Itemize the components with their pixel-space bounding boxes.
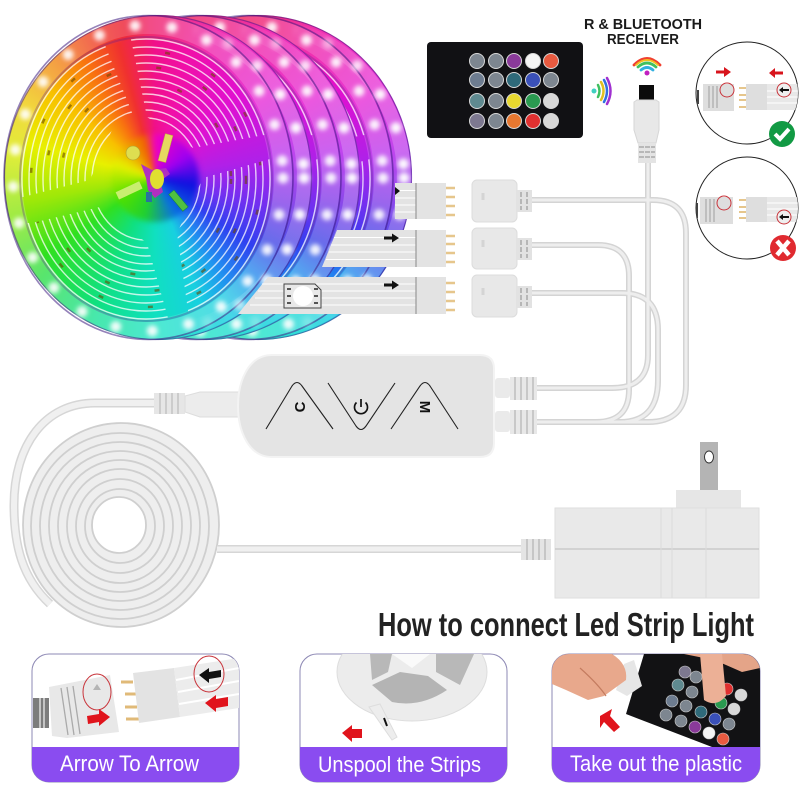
panel: arrow to arrow: Arrow To Arrow <box>60 751 199 776</box>
panel: take out the plastic: Take out the plastic <box>570 751 742 776</box>
receiver label: R & BLUETOOTH <box>584 17 702 33</box>
wires <box>532 163 686 422</box>
strip 3 with LED chip <box>238 277 455 314</box>
power cable to adapter <box>217 545 522 553</box>
panel: unspool the strips: Unspool the Strips <box>318 752 481 777</box>
panel: arrow to arrow <box>32 654 239 782</box>
controller strain relief <box>154 392 242 417</box>
icon: green check <box>769 121 795 147</box>
reel: back <box>227 14 412 340</box>
strip 1 <box>395 183 455 219</box>
icon: sound waves <box>592 78 610 104</box>
LED chip <box>284 284 321 308</box>
panel: unspool the strips <box>300 654 508 782</box>
strip 2 <box>322 230 455 267</box>
icon: power symbol <box>354 399 368 414</box>
callout: correct connection <box>696 42 799 147</box>
icon: red cross <box>770 235 796 261</box>
inline controller: C <box>292 401 309 412</box>
reel: front <box>3 14 313 340</box>
inline controller: M <box>416 401 433 413</box>
female connector 2 <box>472 228 532 269</box>
power cable to coil <box>14 403 156 604</box>
panel: take out the plastic <box>552 654 760 782</box>
callout: wrong connection <box>696 157 799 261</box>
power adapter <box>521 442 759 598</box>
receiver plug <box>634 85 659 163</box>
female connector 3 <box>472 275 532 317</box>
remote control <box>427 42 583 138</box>
icon: wifi signal <box>634 58 660 76</box>
receiver label: RECELVER <box>607 32 679 48</box>
controller output connectors <box>495 377 537 434</box>
receiver label <box>584 17 702 48</box>
LED strip reels <box>3 14 412 340</box>
inline controller <box>238 355 494 457</box>
reel: middle <box>176 14 361 340</box>
coiled cable <box>23 423 219 627</box>
female connector 1 <box>472 180 532 222</box>
